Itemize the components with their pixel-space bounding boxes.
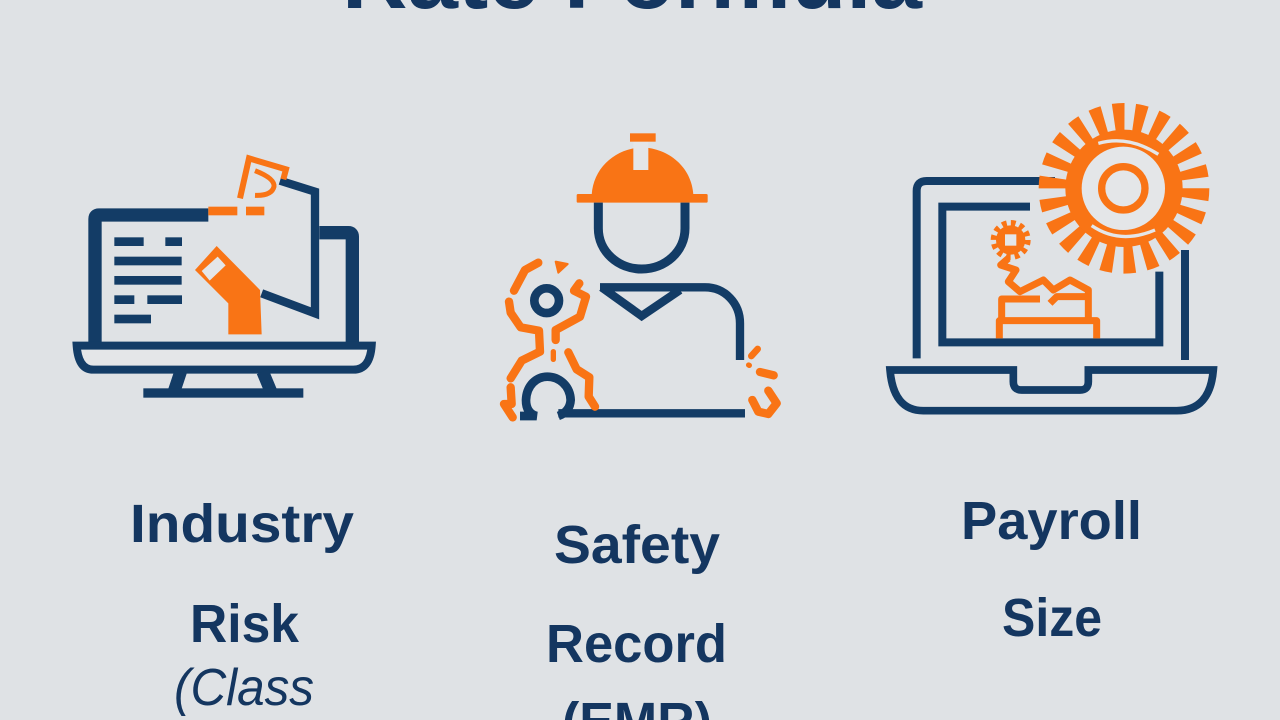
monitor base and stand bbox=[77, 346, 372, 398]
icon: worker with hard hat bbox=[504, 133, 777, 417]
small gear bbox=[994, 223, 1027, 257]
label: payroll size bbox=[961, 491, 1142, 648]
screen outline bbox=[95, 215, 352, 343]
label: industry risk bbox=[130, 494, 354, 717]
label: industry risk: Risk bbox=[190, 594, 300, 654]
orange gear fragments bbox=[504, 262, 777, 417]
label: payroll size: Size bbox=[1002, 588, 1102, 648]
body bbox=[558, 287, 745, 413]
robot machine bbox=[999, 258, 1097, 338]
label: safety record bbox=[546, 515, 727, 720]
label: payroll size: Payroll bbox=[961, 491, 1142, 551]
orange tag bbox=[240, 158, 286, 198]
folded page bbox=[262, 181, 315, 313]
wrench ring and lower arch bbox=[520, 288, 571, 416]
laptop screen outlines bbox=[917, 181, 1185, 360]
label: safety record: Record bbox=[546, 614, 727, 674]
orange dashes bbox=[208, 207, 264, 215]
label: industry risk: Industry bbox=[130, 494, 354, 554]
label: safety record: Safety bbox=[554, 515, 720, 575]
head bbox=[598, 203, 685, 269]
laptop base bbox=[890, 370, 1213, 411]
text lines bbox=[114, 237, 182, 323]
label: industry risk: (Class bbox=[174, 659, 314, 717]
orange arm bbox=[195, 246, 262, 334]
icon: industry risk computer bbox=[77, 158, 372, 398]
icon: payroll laptop with gear bbox=[890, 117, 1213, 411]
large gear bbox=[1053, 117, 1195, 259]
hard hat bbox=[577, 133, 708, 203]
